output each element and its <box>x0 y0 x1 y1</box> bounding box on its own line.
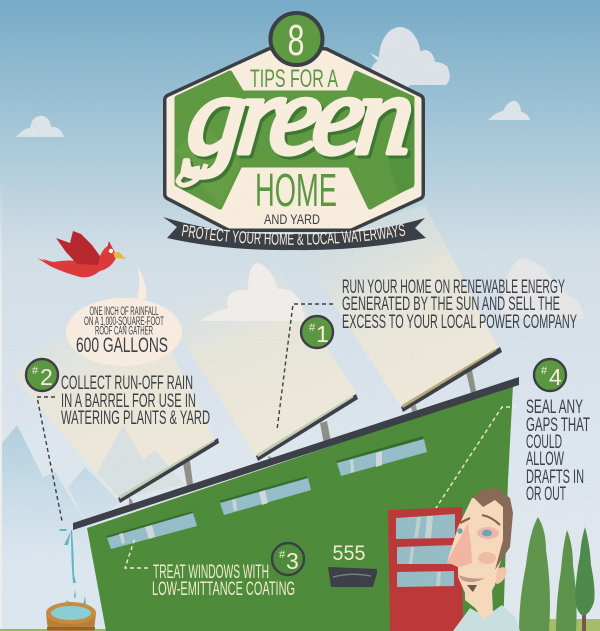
tip 1 badge <box>301 316 333 348</box>
window three <box>336 436 427 476</box>
house wall <box>87 385 513 631</box>
man nose <box>447 523 472 567</box>
tip 4 badge: 4 <box>549 364 562 390</box>
house <box>73 377 519 631</box>
tip 3 leader <box>125 538 148 568</box>
tip 4 <box>436 359 590 508</box>
man shirt <box>453 605 520 631</box>
badge light facet <box>175 125 240 207</box>
tip 2 badge: # <box>32 365 39 377</box>
mountains <box>2 425 183 631</box>
roof <box>73 377 519 530</box>
house number: 555 <box>332 542 366 565</box>
heading: green: green <box>182 51 421 178</box>
tip 3 text: LOW-EMITTANCE COATING <box>152 579 295 600</box>
cloud: small right <box>488 101 530 120</box>
man face <box>447 498 506 600</box>
heading: tips for a: TIPS FOR A <box>250 65 338 93</box>
man hair <box>473 488 513 570</box>
tip 3 text: TREAT WINDOWS WITH <box>153 562 269 583</box>
bird <box>37 231 126 277</box>
tip 4 leader <box>436 407 517 508</box>
tip 3 badge <box>272 543 304 575</box>
tip 2 badge: 2 <box>40 364 53 390</box>
speech bubble: rainfall fact: ON A 1,000-SQUARE-FOOT <box>84 316 164 328</box>
heading: green: green <box>185 54 423 181</box>
tip 4 badge: # <box>541 365 548 377</box>
tip 1 <box>277 277 577 430</box>
man neck <box>465 590 493 620</box>
man cheek <box>478 552 496 564</box>
speech bubble: rainfall fact: ONE INCH OF RAINFALL <box>90 306 159 318</box>
man ear <box>493 567 507 584</box>
light beam: panel one <box>12 265 215 499</box>
trees <box>519 517 595 631</box>
tip 4 text: OR OUT <box>526 484 566 505</box>
tip 4 text: COULD <box>526 432 562 453</box>
man goatee <box>467 585 477 592</box>
speech bubble: rainfall fact: ROOF CAN GATHER <box>95 326 153 338</box>
bird tail and body <box>37 246 117 277</box>
tip 2 text: IN A BARREL FOR USE IN <box>61 391 196 412</box>
rain water stream <box>59 529 86 607</box>
tip 2 text <box>61 373 210 429</box>
man <box>447 488 520 631</box>
tip 4 text <box>526 397 590 505</box>
man eyes <box>457 515 500 539</box>
tip 1 text <box>342 277 577 333</box>
tip 3 <box>125 538 304 600</box>
light beam: panel two <box>160 262 357 458</box>
tip 1 badge: 1 <box>316 321 329 347</box>
badge cream fill <box>170 54 418 225</box>
bird eye <box>109 249 113 253</box>
tip 3 text <box>152 562 295 600</box>
badge <box>170 13 423 227</box>
solar panel two <box>256 394 358 463</box>
bird wing <box>56 231 100 265</box>
tip 3 badge: 3 <box>286 548 299 574</box>
tip 4 badge <box>534 359 566 391</box>
rain barrel <box>46 602 96 631</box>
bird crest <box>107 241 112 248</box>
pale left edge <box>0 180 2 631</box>
tip 2 <box>26 359 210 521</box>
mailbox <box>328 567 377 587</box>
heading: and yard: AND YARD <box>264 211 320 227</box>
solar panel three <box>401 347 502 412</box>
badge frame <box>170 54 418 225</box>
ground: left <box>0 629 110 631</box>
heading: home: HOME <box>255 164 337 216</box>
cloud: top right <box>370 27 450 89</box>
tip 2 badge <box>26 359 58 391</box>
cloud: middle <box>199 263 305 321</box>
bird beak <box>113 252 126 259</box>
tip 1 leader <box>277 304 333 430</box>
number circle: 8 <box>288 16 304 65</box>
tip 3 badge: # <box>279 549 286 561</box>
solar panel one <box>118 438 219 507</box>
speech bubble: rainfall fact: 600 GALLONS <box>76 334 168 357</box>
ribbon: PROTECT YOUR HOME & LOCAL WATERWAYS <box>182 224 406 245</box>
tip 1 badge: # <box>309 322 316 334</box>
tip 4 text: ALLOW <box>526 449 564 470</box>
speech bubble: rainfall fact <box>66 267 182 366</box>
window one <box>106 511 197 549</box>
light beam: panel three <box>295 205 498 408</box>
door <box>388 507 463 631</box>
window two <box>219 476 311 515</box>
ground: right <box>530 619 600 631</box>
man mouth <box>458 575 485 582</box>
tip 2 text: WATERING PLANTS & YARD <box>61 408 210 429</box>
cloud: behind text one <box>500 258 584 319</box>
tip 2 leader <box>37 397 62 521</box>
badge green field <box>177 73 412 207</box>
badge dark facet <box>385 115 414 194</box>
cloud: small left <box>16 116 64 137</box>
tip 2 text: COLLECT RUN-OFF RAIN <box>61 373 193 394</box>
number circle <box>270 13 322 65</box>
